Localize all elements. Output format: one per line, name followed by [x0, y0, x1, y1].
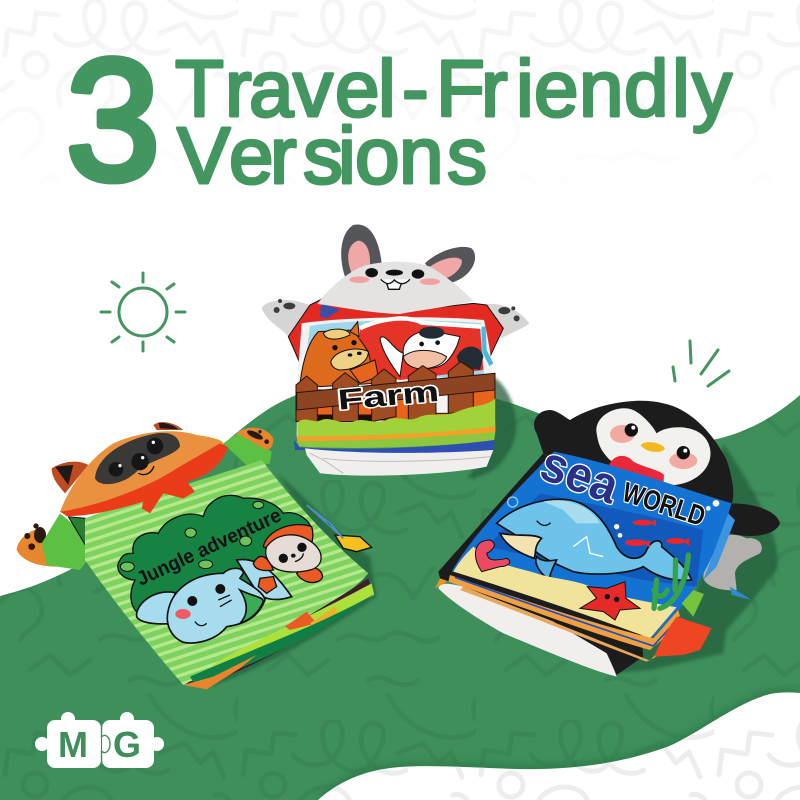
heading line 2: Versions — [177, 111, 487, 200]
rabbit ears — [341, 224, 382, 277]
raccoon head — [60, 431, 223, 512]
page edges — [448, 575, 682, 650]
number 3: 3 — [66, 24, 160, 216]
penguin body — [534, 401, 780, 536]
horse — [300, 322, 378, 387]
shadow — [613, 443, 777, 673]
background squiggle pattern — [0, 0, 800, 240]
white bottom of puppet — [305, 448, 493, 476]
page edges — [187, 578, 373, 687]
black band of puppet — [438, 453, 643, 675]
heading line 1: Travel-Friendly — [175, 44, 732, 133]
monkey — [253, 525, 323, 593]
white back of puppet — [438, 584, 617, 677]
letter G: G — [113, 724, 141, 765]
bottom right white wave — [318, 692, 800, 800]
cactus — [654, 555, 688, 608]
logo: MG puzzle pieces — [35, 712, 164, 768]
green wave background — [0, 383, 800, 800]
rabbit head — [317, 262, 473, 314]
green book cover — [85, 460, 368, 685]
sea label: sea — [534, 435, 627, 515]
wooden fence — [296, 362, 495, 422]
world label: WORLD — [619, 476, 709, 532]
title — [66, 24, 732, 216]
shadow — [210, 473, 377, 687]
red fish — [625, 519, 689, 548]
sand — [453, 547, 677, 638]
book: farm rabbit puppet — [262, 224, 529, 478]
green squiggle pattern — [0, 383, 800, 800]
M puzzle piece — [35, 712, 101, 768]
icon: sun — [101, 273, 185, 351]
page edges — [297, 426, 495, 441]
letter M: M — [58, 724, 88, 765]
whale — [497, 499, 692, 580]
grey plush foot — [703, 535, 762, 590]
raccoon paws and ears — [52, 462, 88, 493]
tail tip — [335, 535, 372, 552]
tree — [118, 495, 312, 613]
book: jungle adventure raccoon puppet — [17, 422, 377, 689]
sea book cover — [452, 452, 732, 638]
grass — [297, 398, 495, 437]
puppet arms — [262, 300, 310, 337]
starfish — [580, 582, 640, 620]
icon: sparkle lines — [673, 341, 729, 386]
shell — [475, 540, 510, 572]
red scarf — [60, 443, 228, 516]
G puzzle piece — [102, 712, 164, 768]
elephant — [137, 559, 292, 643]
red tab — [654, 617, 712, 657]
book cover — [297, 317, 495, 437]
cow — [403, 331, 460, 369]
title: jungle adventure: Jungle adventure — [133, 504, 285, 591]
shadow — [467, 377, 516, 478]
farm label: Farm — [336, 376, 440, 417]
bottom squiggles on white — [318, 692, 800, 800]
book: sea world penguin puppet — [435, 401, 780, 677]
puzzle joint — [102, 722, 110, 766]
red body — [288, 298, 503, 363]
wave edge shading — [318, 688, 800, 800]
